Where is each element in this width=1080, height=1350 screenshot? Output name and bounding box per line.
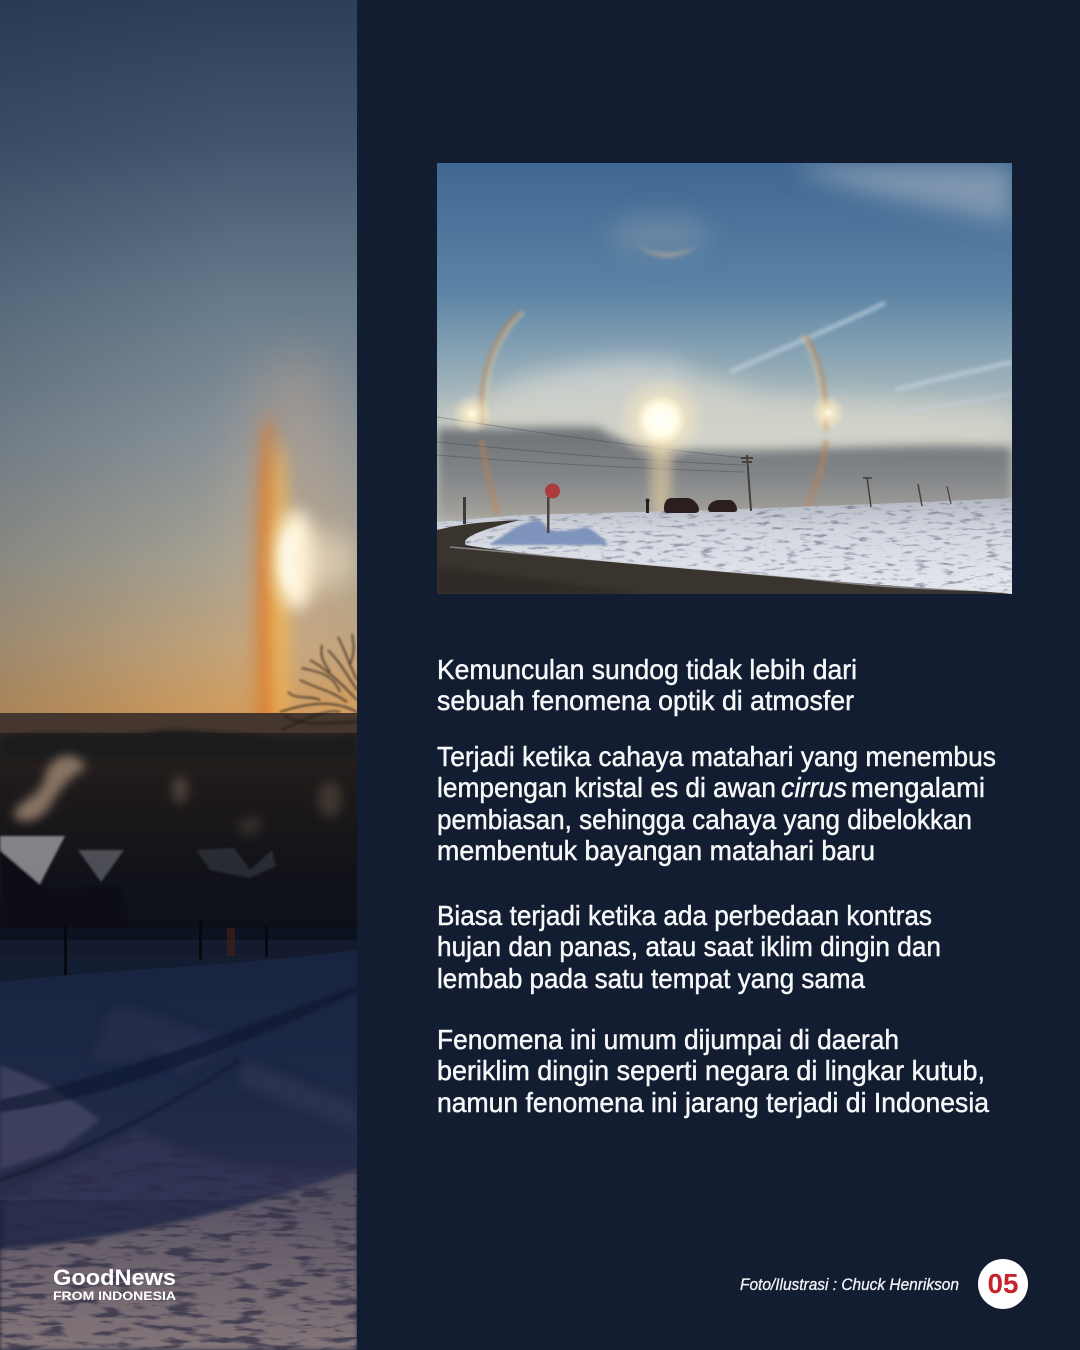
text: intro statement: Kemunculan sundog tidak lebih dari — [437, 654, 857, 685]
text: where it occurs: beriklim dingin seperti negara di lingkar kutub, — [437, 1055, 985, 1086]
text: conditions: lembab pada satu tempat yang sama — [437, 963, 865, 994]
fence posts — [64, 928, 268, 975]
fog bank — [437, 427, 1012, 522]
text: how it happens: mengalami — [851, 772, 985, 803]
text: intro statement — [437, 654, 857, 716]
clouds — [437, 165, 1012, 470]
icon: steam plumes — [13, 756, 342, 836]
text: where it occurs — [437, 1024, 989, 1118]
text: conditions — [437, 900, 941, 994]
snow shadows and light bands — [0, 1065, 100, 1170]
photo: sundog over snowy landscape — [0, 0, 357, 1350]
snowy field — [437, 498, 1012, 594]
text: how it happens: cirrus — [781, 772, 847, 803]
houses — [0, 834, 276, 890]
logo: GoodNews from Indonesia: FROM INDONESIA — [53, 1291, 176, 1303]
snow mound — [490, 520, 608, 545]
sun and sundogs — [623, 380, 699, 462]
text: where it occurs: namun fenomena ini jarang terjadi di Indonesia — [437, 1087, 989, 1118]
text: how it happens: membentuk bayangan matahari baru — [437, 835, 875, 866]
text: conditions: Biasa terjadi ketika ada perbedaan kontras — [437, 900, 932, 931]
logo: GoodNews from Indonesia: GoodNews — [53, 1265, 176, 1290]
text: how it happens: pembiasan, sehingga cahaya yang dibelokkan — [437, 804, 972, 835]
page number badge — [978, 1259, 1028, 1309]
text: conditions: hujan dan panas, atau saat iklim dingin dan — [437, 931, 941, 962]
utility poles — [741, 455, 951, 511]
text: how it happens — [437, 741, 996, 866]
stop sign — [545, 484, 560, 533]
text: how it happens: lempengan kristal es di awan — [437, 772, 776, 803]
text: where it occurs: Fenomena ini umum dijumpai di daerah — [437, 1024, 899, 1055]
snow texture — [0, 1170, 357, 1350]
bare tree — [280, 634, 357, 730]
text: intro statement: sebuah fenomena optik di atmosfer — [437, 685, 854, 716]
photo credit: Foto/Ilustrasi : Chuck Henrikson — [740, 1275, 959, 1294]
photo: sun halo with sundogs over snowy road — [437, 163, 1012, 594]
road — [437, 520, 1012, 594]
halo arcs — [481, 312, 826, 430]
cars and person — [646, 498, 737, 513]
text: how it happens: Terjadi ketika cahaya matahari yang menembus — [437, 741, 996, 772]
logo: GoodNews from Indonesia — [53, 1265, 176, 1303]
page number badge: 05 — [988, 1268, 1018, 1299]
